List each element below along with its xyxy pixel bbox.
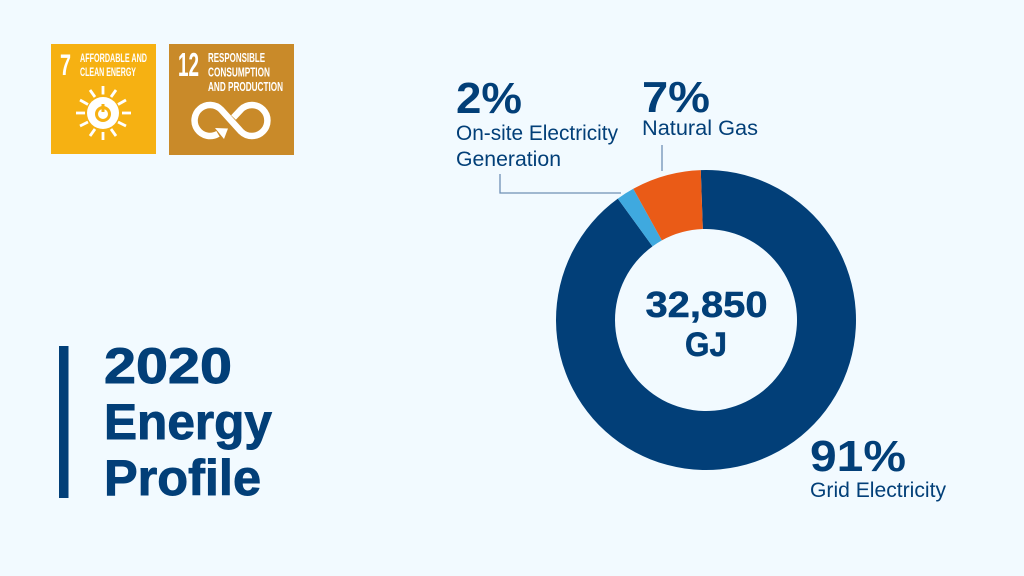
icon: SDG 12 responsible consumption and production: RESPONSIBLE xyxy=(208,50,265,65)
label: grid electricity: 91% xyxy=(810,432,906,481)
label: on-site electricity generation xyxy=(456,74,618,171)
title: Energy xyxy=(104,394,272,450)
icon: SDG 7 affordable and clean energy: AFFORDABLE AND xyxy=(80,53,147,65)
icon: SDG 7 affordable and clean energy xyxy=(51,44,156,154)
label: natural gas xyxy=(642,73,758,140)
label: grid electricity xyxy=(810,432,946,502)
label: natural gas: 7% xyxy=(642,73,710,122)
segment: grid electricity 91% xyxy=(556,170,856,470)
label: natural gas: Natural Gas xyxy=(642,117,758,140)
label: on-site electricity generation: Generation xyxy=(456,148,561,171)
label: on-site electricity generation: 2% xyxy=(456,74,522,123)
icon: SDG 7 affordable and clean energy: CLEAN ENERGY xyxy=(80,67,136,79)
center total: GJ xyxy=(685,326,727,364)
leader line: natural gas xyxy=(661,145,663,171)
leader line: on-site electricity xyxy=(500,174,621,193)
center total: 32,850 xyxy=(646,284,768,325)
center total xyxy=(646,284,768,364)
segment: on-site electricity generation 2% xyxy=(618,189,662,246)
icon: SDG 12 responsible consumption and production: 12 xyxy=(178,46,199,83)
donut chart xyxy=(556,170,856,470)
title accent bar xyxy=(59,346,68,498)
label: grid electricity: Grid Electricity xyxy=(810,479,946,502)
icon: SDG 12 responsible consumption and production: AND PRODUCTION xyxy=(208,79,283,94)
label: on-site electricity generation: On-site Electricity xyxy=(456,122,618,145)
title: Profile xyxy=(104,450,261,506)
title xyxy=(59,338,272,506)
icon: SDG 12 responsible consumption and production: CONSUMPTION xyxy=(208,64,270,80)
segment: natural gas 7% xyxy=(633,170,703,240)
title: 2020 xyxy=(104,338,232,394)
icon: SDG 12 responsible consumption and production xyxy=(169,44,294,155)
icon: SDG 7 affordable and clean energy: 7 xyxy=(60,49,71,82)
